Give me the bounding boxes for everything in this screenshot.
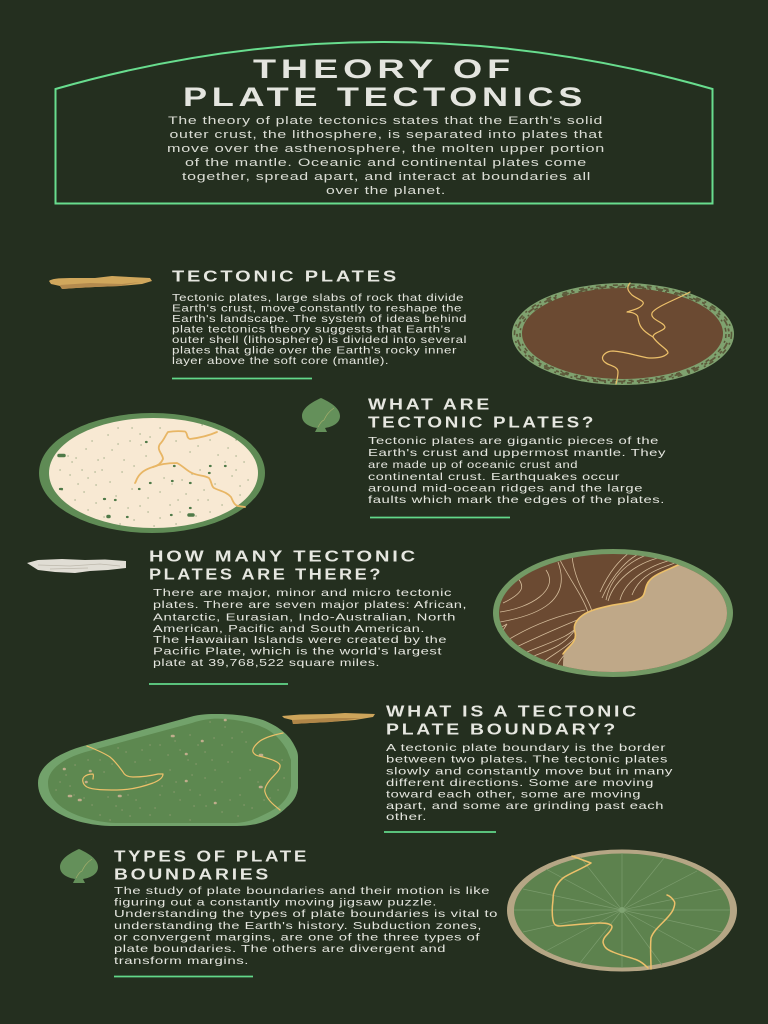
heading	[114, 848, 309, 884]
panel: tectonic plates	[49, 268, 734, 385]
heading: HOW MANY TECTONIC	[149, 548, 418, 566]
body text: understanding the Earth's history. Subduction zones,	[114, 921, 482, 932]
body text: toward each other, some are moving	[386, 790, 641, 800]
illustration: cream speckled plate	[39, 413, 265, 533]
illustration: brown plate with patterned ring	[512, 283, 734, 385]
body text: other.	[386, 812, 427, 823]
body text: A tectonic plate boundary is the border	[386, 743, 666, 754]
body text: The Hawaiian Islands were created by the	[153, 635, 447, 646]
intro text: move over the asthenosphere, the molten upper portion	[167, 143, 605, 155]
body text: faults which mark the edges of the plates.	[368, 495, 665, 506]
intro text	[167, 115, 605, 197]
intro text: outer crust, the lithosphere, is separated into plates that	[170, 129, 603, 141]
body text: There are major, minor and micro tectonic	[153, 588, 452, 599]
body text: Earth's crust and uppermost mantle. They	[368, 448, 667, 459]
body text: between two plates. The tectonic plates	[386, 754, 668, 766]
icon: tan rock	[49, 276, 152, 289]
panel: types of plate boundaries	[60, 848, 737, 976]
illustration: green rounded plate	[38, 714, 298, 826]
body text: are made up of oceanic crust and	[368, 460, 578, 471]
body text: around mid-ocean ridges and the large	[368, 484, 643, 494]
body text: plate tectonics theory suggests that Earth's	[172, 324, 451, 336]
body text: apart, and some are grinding past each	[386, 801, 664, 812]
icon: tan rock	[282, 713, 375, 724]
heading: TECTONIC PLATES?	[368, 414, 596, 432]
heading: TYPES OF PLATE	[114, 848, 309, 866]
body text	[114, 886, 498, 967]
heading: WHAT ARE	[368, 396, 492, 414]
arched frame	[56, 42, 712, 204]
icon: white rock	[27, 559, 126, 573]
body text: continental crust. Earthquakes occur	[368, 472, 620, 483]
body text	[172, 293, 467, 367]
panel: how many tectonic plates	[27, 545, 740, 685]
heading: PLATES ARE THERE?	[149, 566, 383, 584]
intro text: The theory of plate tectonics states that the Earth's solid	[168, 115, 603, 127]
body text	[153, 588, 467, 669]
body text: Understanding the types of plate boundaries is vital to	[114, 909, 498, 920]
body text: or convergent margins, are one of the three types of	[114, 932, 480, 944]
body text	[368, 436, 667, 506]
heading	[386, 704, 639, 738]
body text: plates that glide over the Earth's rocky inner	[172, 346, 457, 356]
body text: American, Pacific and South American.	[153, 624, 425, 635]
body text: Earth's landscape. The system of ideas behind	[172, 314, 467, 325]
intro text: of the mantle. Oceanic and continental plates come	[185, 157, 587, 169]
title: THEORY OF	[253, 54, 515, 84]
icon: leaf	[60, 849, 98, 883]
body text: Pacific Plate, which is the world's largest	[153, 646, 442, 658]
intro text: together, spread apart, and interact at boundaries all	[182, 171, 591, 183]
body text: The study of plate boundaries and their motion is like	[114, 886, 490, 897]
heading: PLATE BOUNDARY?	[386, 722, 618, 738]
heading	[368, 396, 596, 432]
panel: what is a plate boundary	[38, 704, 674, 832]
body text: plate at 39,768,522 square miles.	[153, 658, 380, 669]
body text: plates. There are seven major plates: African,	[153, 600, 467, 611]
intro text: over the planet.	[326, 185, 446, 197]
header panel	[56, 42, 712, 204]
body text: different directions. Some are moving	[386, 778, 654, 789]
body text: layer above the soft core (mantle).	[172, 356, 389, 367]
title	[183, 54, 587, 112]
panel: what are tectonic plates	[39, 396, 667, 533]
body text: Tectonic plates are gigantic pieces of the	[368, 436, 659, 447]
heading: WHAT IS A TECTONIC	[386, 704, 639, 720]
body text: transform margins.	[114, 956, 249, 967]
body text: plate boundaries. The others are divergent and	[114, 944, 446, 955]
title: PLATE TECTONICS	[183, 82, 587, 112]
body text	[386, 743, 674, 823]
body text: Earth's crust, move constantly to reshape the	[172, 304, 462, 314]
heading: TECTONIC PLATES	[172, 268, 399, 286]
icon: leaf	[302, 398, 340, 432]
body text: slowly and constantly move but in many	[386, 766, 674, 778]
heading: BOUNDARIES	[114, 866, 271, 884]
heading	[149, 548, 418, 584]
body text: outer shell (lithosphere) is divided into several	[172, 335, 467, 346]
body text: Antarctic, Eurasian, Indo-Australian, North	[153, 612, 456, 624]
body text: figuring out a constantly moving jigsaw puzzle.	[114, 898, 437, 908]
illustration: radial green plate	[507, 850, 737, 972]
illustration: contour plate	[493, 549, 733, 677]
body text: Tectonic plates, large slabs of rock that divide	[172, 293, 464, 304]
